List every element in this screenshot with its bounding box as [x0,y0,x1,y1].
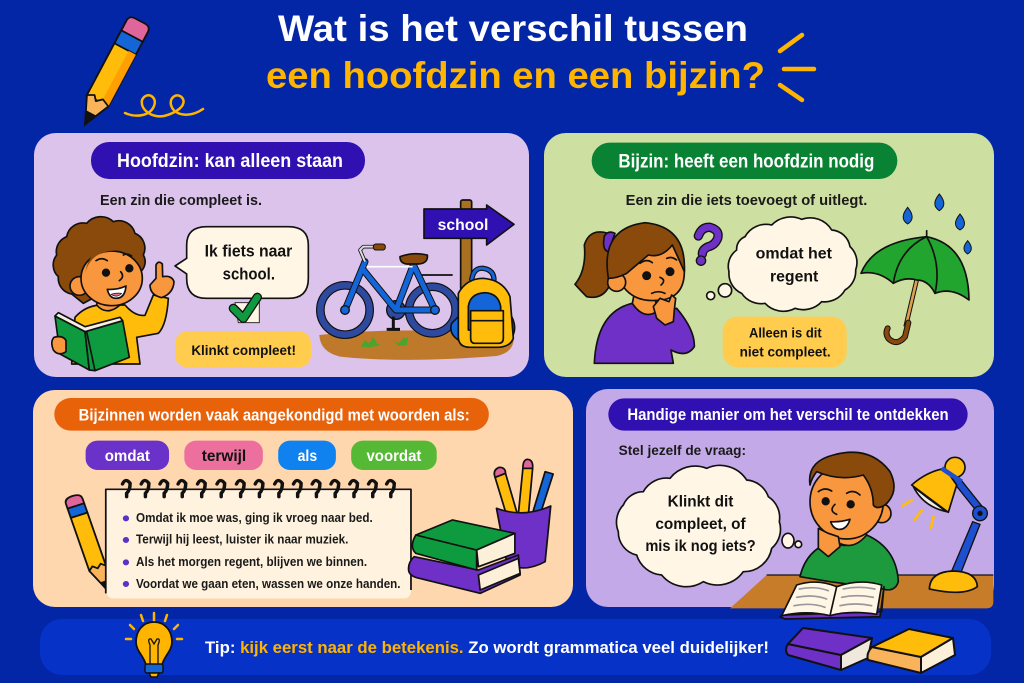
illustration: girl thinking [575,223,694,363]
illustration: boy thinking [800,452,898,590]
thought bubble: omdat het regent: omdat het [756,245,833,262]
thought bubble: omdat het regent [707,217,857,311]
example sentences notebook: Omdat ik moe was, ging ik vroeg naar bed. [136,510,373,525]
callout: alleen: niet compleet. [740,344,831,360]
callout: alleen [723,317,847,367]
heading: handige manier [608,398,968,431]
illustration: backpack [451,268,515,347]
panel: signaalwoorden [33,390,573,607]
icon: books [786,628,955,673]
illustration: lamp [903,457,987,592]
example sentences notebook: Voordat we gaan eten, wassen we onze handen. [136,576,401,591]
illustration: grass [361,337,408,347]
thought bubble: vraag: Klinkt dit [668,494,734,511]
illustration: open book [780,582,884,619]
heading: handige manier: Handige manier om het verschil te ontdekken [627,405,949,424]
panel: bijzin [544,133,994,377]
thought bubble: omdat het regent: regent [770,269,819,286]
icon: pencil with squiggle [74,15,203,130]
description: vraag: Stel jezelf de vraag: [619,442,746,458]
panel: tip [40,613,991,677]
heading: signaalwoorden: Bijzinnen worden vaak aangekondigd met woorden als: [79,406,470,425]
illustration: road sign [424,200,514,290]
thought bubble: vraag [616,465,802,587]
example sentences notebook: Als het morgen regent, blijven we binnen. [136,554,367,569]
chip: als: als [298,448,317,465]
chip: omdat [86,441,169,470]
description: hoofdzin: Een zin die compleet is. [100,192,262,209]
illustration: bicycle [320,244,456,335]
thought bubble: vraag: compleet, of [655,516,746,533]
panel: hoofdzin [34,133,529,377]
heading: bijzin: Bijzin: heeft een hoofdzin nodig [618,151,874,172]
heading: signaalwoorden [54,398,489,431]
illustration: ground [319,330,514,360]
example sentences notebook: Terwijl hij leest, luister ik naar muziek. [136,532,348,547]
callout: klinkt compleet: Klinkt compleet! [191,342,296,358]
chip: omdat: omdat [105,448,151,465]
icon: rays [780,35,814,100]
illustration: stacked books [409,520,520,593]
description: bijzin: Een zin die iets toevoegt of uitlegt. [626,192,867,209]
thought bubble: vraag: mis ik nog iets? [645,538,756,555]
tip text: Tip: kijk eerst naar de betekenis. Zo wordt grammatica veel duidelijker! [205,638,769,657]
notebook spiral [122,480,394,497]
heading: bijzin [592,143,897,179]
chip: terwijl [184,441,263,470]
chip: als [278,441,336,470]
title [266,8,765,96]
panel: handige manier [586,389,994,619]
callout: klinkt compleet [175,331,311,367]
chip: terwijl: terwijl [202,448,246,465]
illustration: pencil cup [494,459,553,568]
icon: check mark [233,297,259,323]
example sentences notebook [106,480,411,598]
chip: voordat [351,441,437,470]
icon: rain drops [903,194,971,254]
icon: umbrella [861,231,969,342]
illustration: boy with book [52,217,174,371]
speech bubble [175,227,308,298]
title: een hoofdzin en een bijzin? [266,55,765,96]
icon: question mark [696,227,718,265]
icon: left pencil [64,493,114,594]
title: Wat is het verschil tussen [278,8,748,49]
illustration: desk [730,575,993,608]
heading: hoofdzin: Hoofdzin: kan alleen staan [117,151,343,172]
speech bubble: Ik fiets naar [205,242,293,261]
callout: alleen: Alleen is dit [749,324,822,340]
illustration: road sign: school [438,217,488,234]
icon: light bulb [126,613,182,677]
speech bubble: school. [223,264,275,283]
chip: voordat: voordat [366,448,422,465]
heading: hoofdzin [91,142,365,179]
